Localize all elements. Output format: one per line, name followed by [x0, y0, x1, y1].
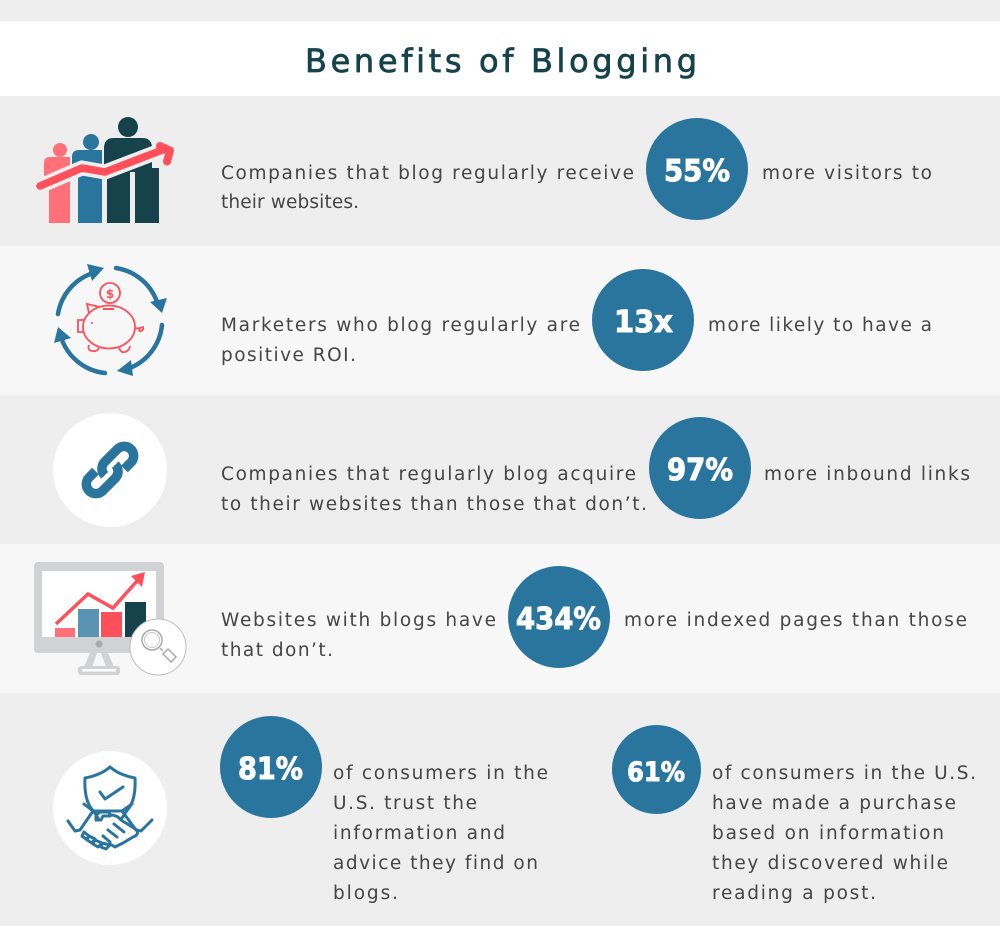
text: ROI: positive ROI.	[221, 345, 356, 366]
text: ROI: more likely to have a	[708, 315, 932, 336]
stat bubble: 13x: 13x	[614, 305, 673, 340]
text: indexed pages: more indexed pages than those	[624, 610, 967, 631]
text: 81%: advice they find on	[333, 853, 538, 874]
text: inbound links: Companies that regularly blog acquire	[221, 464, 636, 485]
panel: inbound links	[0, 395, 1000, 544]
text: 81%: U.S. trust the	[333, 793, 477, 814]
text: visitors: more visitors to	[762, 163, 932, 184]
text: ROI	[221, 315, 932, 366]
stat bubble: 81%	[220, 716, 322, 818]
panel: consumer trust	[0, 693, 1000, 926]
stat bubble: 61%	[612, 725, 701, 814]
text: 61%: they discovered while	[712, 853, 948, 874]
text: 61%	[712, 763, 976, 904]
text: visitors: their websites.	[221, 192, 359, 213]
text: indexed pages	[221, 610, 967, 661]
text: 81%: blogs.	[333, 883, 398, 904]
stat bubble: 61%: 61%	[627, 757, 685, 788]
panel: visitors	[0, 97, 1000, 246]
text: 61%: based on information	[712, 823, 944, 844]
stat bubble: 434%: 434%	[516, 602, 601, 637]
text: inbound links: to their websites than those that don’t.	[221, 494, 647, 515]
stat bubble: 97%: 97%	[667, 453, 733, 488]
text: inbound links: more inbound links	[764, 464, 970, 485]
icon: piggy bank with cycle arrows: $	[106, 287, 114, 301]
text: 81%: of consumers in the	[333, 763, 548, 784]
stat bubble: 97%	[649, 417, 751, 519]
text: visitors: Companies that blog regularly receive	[221, 163, 634, 184]
stat bubble: 81%: 81%	[238, 752, 303, 787]
title: Benefits of Blogging	[305, 42, 697, 80]
text: ROI: Marketers who blog regularly are	[221, 315, 580, 336]
text: inbound links	[221, 464, 970, 515]
text: 81%: information and	[333, 823, 505, 844]
icon: monitor with chart and magnifier	[34, 562, 186, 675]
text: 61%: have made a purchase	[712, 793, 956, 814]
text: 61%: reading a post.	[712, 883, 876, 904]
panel: indexed pages	[0, 544, 1000, 693]
icon: chain link	[53, 413, 167, 527]
panel: ROI	[0, 246, 1000, 395]
stat bubble: 55%: 55%	[664, 154, 730, 189]
stat bubble: 55%	[646, 118, 748, 220]
icon: growing people with arrow	[40, 117, 170, 223]
text: visitors	[221, 163, 932, 213]
text: 81%	[333, 763, 548, 904]
text: indexed pages: Websites with blogs have	[221, 610, 496, 631]
panel: header	[0, 21, 1000, 96]
text: indexed pages: that don’t.	[221, 640, 333, 661]
icon: piggy bank with cycle arrows	[54, 264, 167, 376]
icon: shield and handshake	[53, 751, 167, 865]
text: 61%: of consumers in the U.S.	[712, 763, 976, 784]
stat bubble: 13x	[592, 269, 694, 371]
stat bubble: 434%	[508, 566, 610, 668]
